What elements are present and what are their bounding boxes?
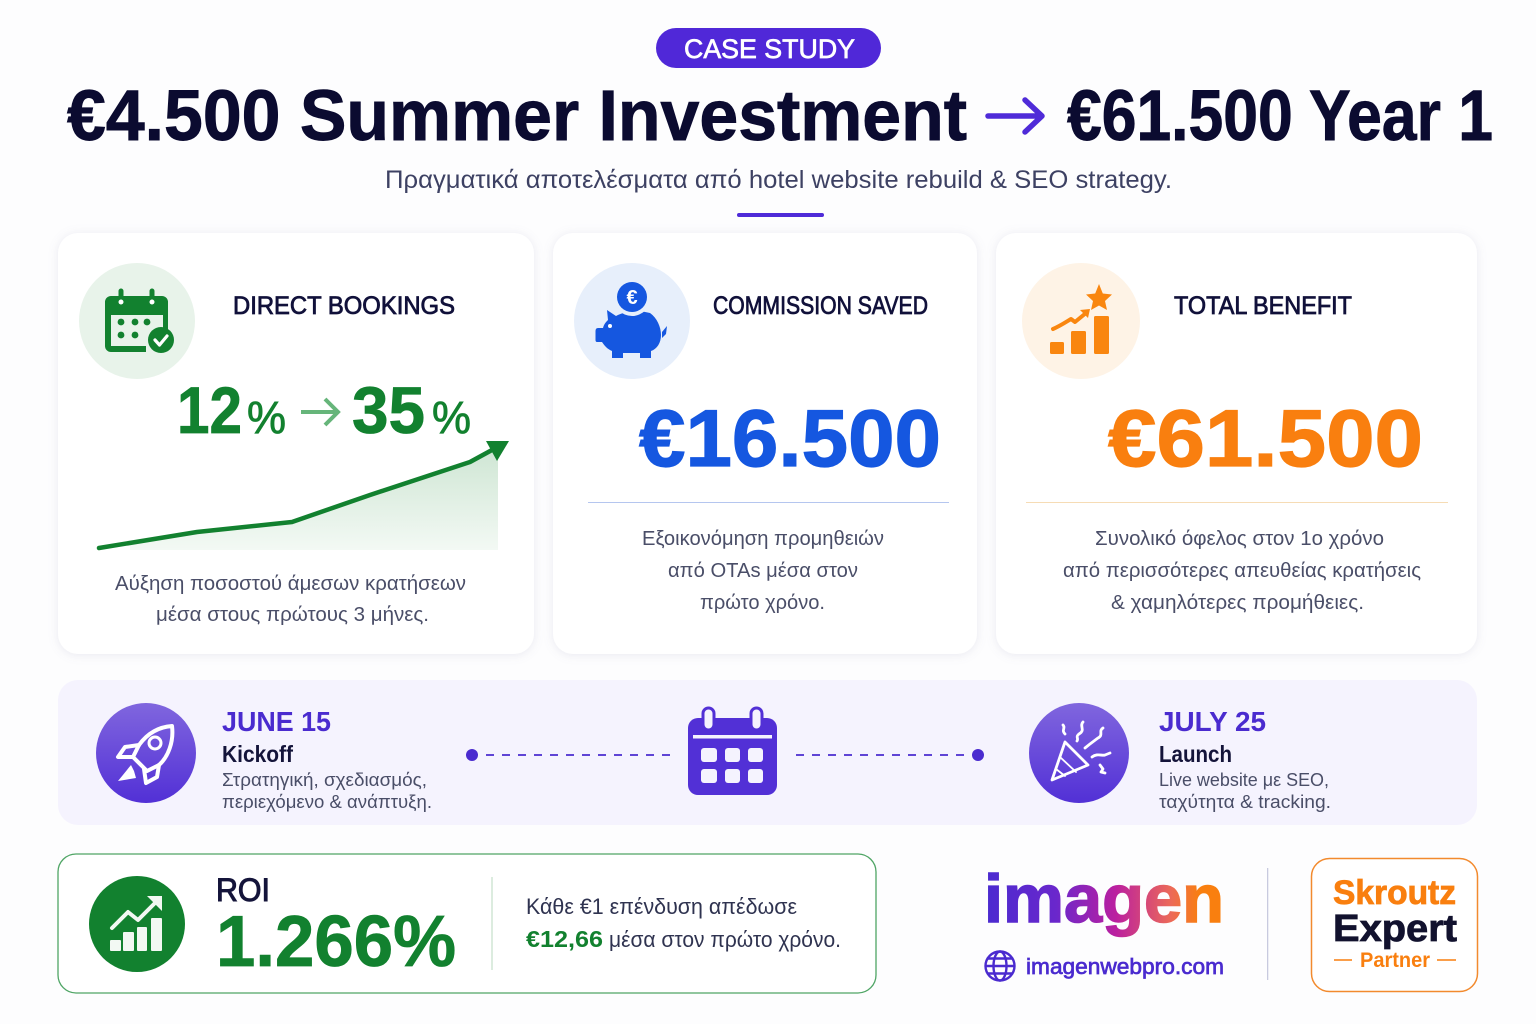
icon: party popper [1029, 703, 1129, 803]
text: june 15 kickoff: περιεχόμενο & ανάπτυξη. [222, 792, 432, 812]
text: june 15 kickoff: JUNE 15 [222, 706, 331, 737]
text: commission description: πρώτο χρόνο. [700, 592, 825, 614]
panel: roi [58, 854, 876, 993]
text: website: imagenwebpro.com [1026, 954, 1224, 979]
badge: case study: CASE STUDY [684, 34, 855, 64]
text: total benefit description: & χαμηλότερες προμήθειες. [1111, 592, 1364, 614]
text: direct bookings description [115, 573, 466, 626]
icon: calendar [688, 708, 777, 795]
icon: roi chart [89, 876, 185, 972]
text: july 25 launch: Launch [1159, 741, 1232, 767]
metric: 12% to 35%: 12 [177, 373, 242, 447]
text: roi explanation [526, 894, 841, 952]
metric: 12% to 35% [177, 373, 471, 447]
text: direct bookings description: μέσα στους πρώτους 3 μήνες. [156, 604, 429, 626]
badge: skroutz expert partner: Skroutz [1333, 874, 1456, 912]
text: july 25 launch: ταχύτητα & tracking. [1159, 792, 1331, 812]
subtitle: Πραγματικά αποτελέσματα από hotel website rebuild & SEO strategy. [385, 166, 1172, 194]
metric: 12% to 35%: % [432, 392, 471, 443]
icon: piggy bank: € [626, 287, 638, 309]
panel: timeline [58, 680, 1477, 825]
text: july 25 launch: Live website με SEO, [1159, 770, 1329, 790]
text: commission description [642, 528, 884, 614]
text: roi explanation: €12,66 [526, 926, 603, 952]
text: june 15 kickoff: Στρατηγική, σχεδιασμός, [222, 770, 427, 790]
badge: skroutz expert partner [1312, 858, 1478, 992]
text: total benefit description: Συνολικό όφελος στον 1ο χρόνο [1095, 528, 1384, 550]
text: july 25 launch [1159, 706, 1331, 812]
text: commission description: από OTAs μέσα στον [668, 560, 858, 582]
text: commission description: Εξοικονόμηση προμηθειών [642, 528, 884, 550]
badge: case study [656, 28, 881, 68]
text: roi value: ROI [216, 872, 270, 908]
text: june 15 kickoff [222, 706, 432, 812]
text: total benefit description [1063, 528, 1421, 614]
badge: skroutz expert partner: Partner [1360, 949, 1430, 972]
heading: total benefit: TOTAL BENEFIT [1174, 292, 1352, 320]
connector: right dashed line [796, 749, 984, 761]
panel: total benefit [996, 233, 1477, 654]
icon: calendar check [79, 263, 195, 379]
title [67, 77, 1493, 156]
title: €4.500 Summer Investment [67, 77, 967, 156]
metric: 12% to 35%: 35 [352, 373, 425, 447]
logo: imagen: imagen [984, 861, 1224, 937]
heading: direct bookings: DIRECT BOOKINGS [233, 292, 455, 320]
icon: globe [986, 952, 1014, 980]
text: july 25 launch: JULY 25 [1159, 706, 1266, 737]
icon: rocket [96, 703, 196, 803]
panel: direct bookings [58, 233, 534, 654]
logo: imagen [984, 861, 1224, 980]
text: total benefit description: από περισσότερες απευθείας κρατήσεις [1063, 560, 1421, 582]
text: roi explanation: Κάθε €1 επένδυση απέδωσε [526, 894, 797, 919]
icon: piggy bank [574, 263, 690, 379]
metric: 61.500 euro: €61.500 [1108, 394, 1423, 484]
metric: 12% to 35%: % [247, 392, 286, 443]
metric: 16.500 euro: €16.500 [639, 394, 941, 484]
chart: growth line [99, 441, 509, 550]
text: june 15 kickoff: Kickoff [222, 741, 293, 767]
icon: bars and star [1022, 263, 1140, 379]
text: roi explanation: μέσα στον πρώτο χρόνο. [609, 927, 841, 952]
text: roi value: 1.266% [216, 902, 456, 982]
panel: commission saved [553, 233, 977, 654]
connector: left dashed line [466, 749, 670, 761]
text: direct bookings description: Αύξηση ποσοστού άμεσων κρατήσεων [115, 573, 466, 595]
heading: commission saved: COMMISSION SAVED [713, 292, 928, 320]
badge: skroutz expert partner: Expert [1333, 908, 1457, 950]
